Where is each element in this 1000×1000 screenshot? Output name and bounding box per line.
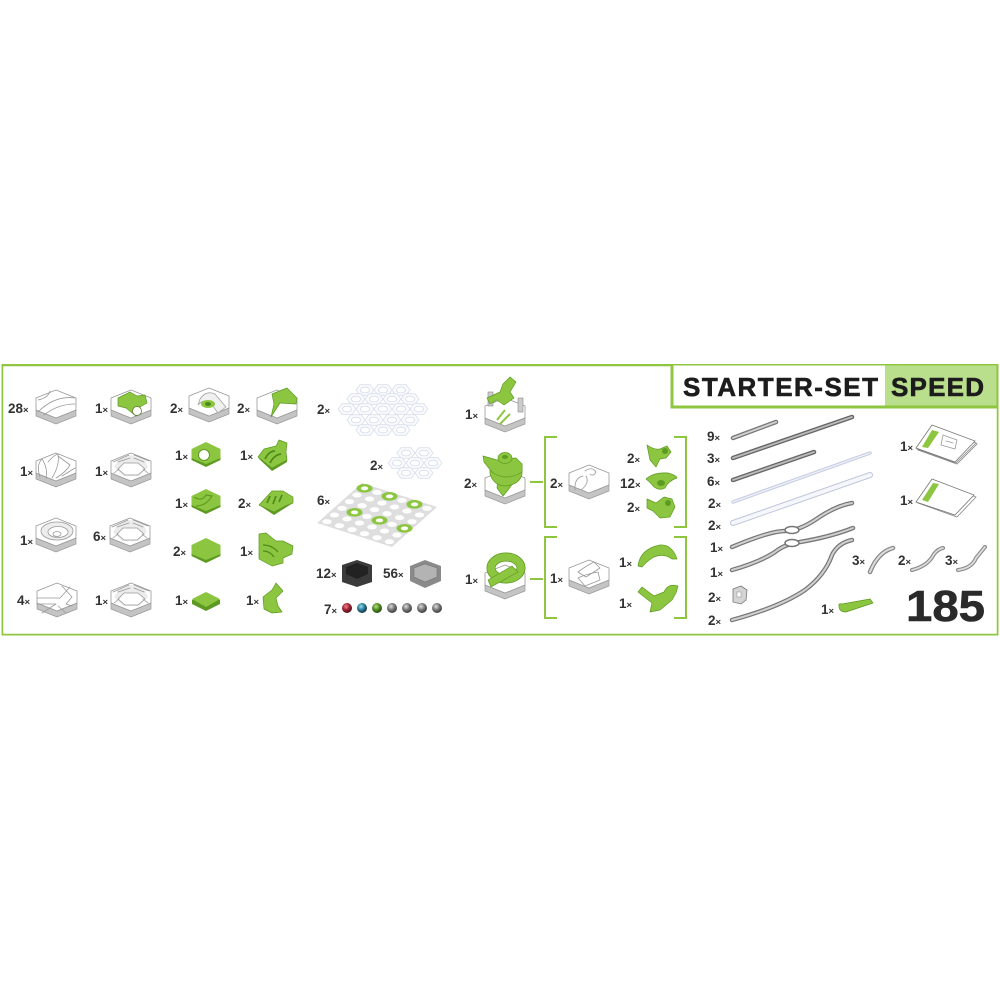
green crescent 1x	[246, 583, 283, 613]
green block with ribs 1x: 1×	[240, 448, 254, 463]
spiral part 2x	[627, 445, 671, 467]
base tile 1x in bracket: 1×	[550, 571, 564, 586]
title banner	[672, 364, 998, 407]
title banner: STARTER-SET	[683, 372, 878, 402]
short curved rail 3x right: 3×	[945, 553, 959, 568]
total count 185: 185	[906, 582, 985, 631]
rail labels	[707, 429, 724, 628]
green hex plain 2x	[173, 538, 220, 563]
tile 1x ring	[95, 453, 151, 487]
spiral tile 2x	[464, 452, 525, 504]
tile 2x ramp: 2×	[170, 401, 184, 416]
gray height tile 56x: 56×	[383, 566, 404, 581]
spiral tile 2x: 2×	[464, 476, 478, 491]
tile 1x ring: 1×	[95, 464, 109, 479]
loop tile 1x: 1×	[465, 572, 479, 587]
green hex plain 2x: 2×	[173, 544, 187, 559]
column 1: white tiles	[8, 390, 77, 617]
booklet with plan 1x	[900, 425, 977, 464]
short curved rail 2x: 2×	[898, 553, 912, 568]
booklet 1x: 1×	[900, 493, 914, 508]
tile 1x fan: 1×	[20, 464, 34, 479]
loop tile 1x	[465, 557, 525, 599]
arch part 1x	[619, 545, 677, 570]
rail labels: 1×	[710, 565, 724, 580]
tower tile 1x: 1×	[465, 407, 479, 422]
green block with ribs 2x: 2×	[238, 496, 252, 511]
base tile 1x in bracket	[550, 560, 609, 594]
tile 4x cross: 4×	[17, 593, 31, 608]
rail 6x medium	[733, 452, 814, 480]
green hex flat 1x: 1×	[175, 593, 189, 608]
small hex plate	[370, 448, 442, 478]
arch part 1x: 1×	[619, 555, 633, 570]
S-curve rail	[732, 540, 852, 620]
short curved rail 2x	[898, 548, 943, 570]
green hex with hole: 1×	[175, 448, 189, 463]
short curved rail 3x: 3×	[852, 553, 866, 568]
spiral part 2x lower	[627, 497, 675, 518]
tile 1x ring open	[95, 583, 151, 617]
green hex notched	[175, 489, 220, 514]
green lever 1x	[821, 599, 873, 617]
rail labels: 2×	[708, 613, 722, 628]
large hex plate: 2×	[317, 402, 331, 417]
green hex flat 1x	[175, 592, 220, 611]
large hex plate	[317, 385, 428, 435]
clip part	[733, 586, 747, 604]
marbles 7x	[324, 602, 442, 617]
spiral part 2x lower: 2×	[627, 500, 641, 515]
tile 1x green insert: 1×	[95, 401, 109, 416]
green curved block 1x	[240, 533, 293, 566]
dark height tile 12x	[316, 560, 372, 587]
rail 3x long	[733, 417, 852, 458]
short curved rail 3x	[852, 548, 893, 572]
transparent rail wide	[733, 475, 870, 523]
dark height tile 12x: 12×	[316, 566, 337, 581]
background panel	[2, 364, 998, 636]
rail labels: 2×	[708, 496, 722, 511]
tile 28x	[8, 390, 76, 424]
twin curve part 1x	[619, 585, 678, 612]
spiral part 2x: 2×	[627, 451, 641, 466]
tile 1x ring open: 1×	[95, 593, 109, 608]
connector and bracket upper	[530, 437, 686, 527]
small hex plate: 2×	[370, 458, 384, 473]
tile 2x ramp	[170, 388, 229, 422]
tower tile 1x	[465, 377, 525, 432]
marbles 7x: 7×	[324, 602, 338, 617]
green hex notched: 1×	[175, 496, 189, 511]
wavy rail lower	[732, 528, 853, 570]
base board 6x	[317, 483, 437, 547]
wavy rail upper	[732, 503, 852, 547]
gray height tile 56x	[383, 560, 441, 588]
tile 1x ring spiral: 1×	[20, 533, 34, 548]
booklet with plan 1x: 1×	[900, 439, 914, 454]
title banner: SPEED	[891, 372, 984, 402]
tile 2x green roof	[237, 388, 297, 424]
spiral part 12x: 12×	[620, 476, 641, 491]
connector and bracket lower	[530, 537, 686, 618]
column 3: tiles and green parts	[170, 388, 297, 611]
column 2: white tiles	[93, 390, 151, 617]
tile 2x green roof: 2×	[237, 401, 251, 416]
transparent rail thin	[733, 453, 870, 502]
rail labels: 6×	[707, 474, 721, 489]
tile 1x ring spiral	[20, 518, 76, 552]
green crescent 1x: 1×	[246, 593, 260, 608]
tile 6x ring	[93, 518, 150, 552]
rail labels: 1×	[710, 540, 724, 555]
base tile 2x in bracket: 2×	[550, 476, 564, 491]
green lever 1x: 1×	[821, 602, 835, 617]
base board 6x: 6×	[317, 493, 331, 508]
tile 1x green insert	[95, 390, 151, 424]
rail 9x short	[733, 422, 776, 438]
rail labels: 3×	[707, 451, 721, 466]
base tile 2x in bracket	[550, 465, 609, 499]
green block with ribs 1x	[240, 440, 287, 471]
tile 6x ring: 6×	[93, 529, 107, 544]
short curved rail 3x right	[945, 547, 985, 570]
tile 1x fan	[20, 453, 76, 487]
green curved block 1x: 1×	[240, 544, 254, 559]
green block with ribs 2x	[238, 491, 293, 515]
rail labels: 2×	[708, 590, 722, 605]
infographic	[2, 364, 998, 636]
green hex with hole	[175, 442, 220, 467]
booklet 1x	[900, 479, 976, 517]
tile 4x cross	[17, 583, 77, 617]
tile 28x: 28×	[8, 401, 29, 416]
spiral part 12x	[620, 473, 677, 491]
rail labels: 9×	[707, 429, 721, 444]
column 4: green parts	[238, 440, 293, 613]
rail labels: 2×	[708, 518, 722, 533]
twin curve part 1x: 1×	[619, 596, 633, 611]
